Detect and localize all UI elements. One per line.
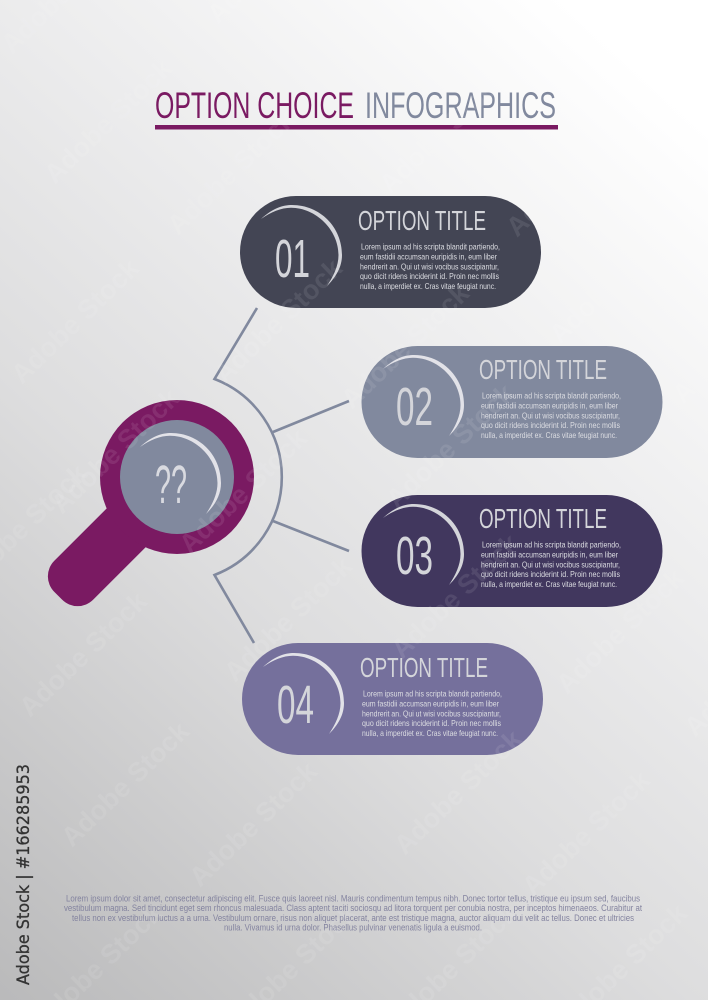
panel: option 01: hendrerit an. Qui ut wisi vocibus suscipiantur, (360, 261, 499, 271)
panel: option 02: 02 (396, 377, 433, 437)
stock id label: Adobe Stock | #166285953 (14, 764, 34, 985)
panel: option 04: nulla, a imperdiet ex. Cras vitae feugiat nunc. (362, 728, 498, 738)
panel: option 03: OPTION TITLE (479, 503, 607, 534)
watermark pattern: Adobe Stock (543, 212, 684, 349)
watermark pattern: Adobe Stock (380, 377, 521, 514)
panel: option 03: nulla, a imperdiet ex. Cras vitae feugiat nunc. (481, 579, 617, 589)
panel: option 04: quo dicit ridens inciderint id. Proin nec mollis (362, 718, 501, 728)
title: OPTION CHOICE (155, 85, 354, 126)
panel: option 01 (240, 196, 541, 308)
watermark pattern: Adobe Stock (373, 62, 514, 199)
watermark pattern: Adobe Stock (55, 715, 196, 852)
panel: option 03: Lorem ipsum ad his scripta blandit partiendo, (482, 540, 621, 550)
panel: option 04: Lorem ipsum ad his scripta blandit partiendo, (363, 688, 502, 698)
panel: option 03: quo dicit ridens inciderint id. Proin nec mollis (481, 569, 620, 579)
watermark pattern: Adobe Stock (550, 562, 691, 699)
footer text block: nulla. Vivamus id urna dolor. Phasellus pulvinar venenatis ligula a euismod. (224, 922, 482, 932)
panel: option 02: quo dicit ridens inciderint id. Proin nec mollis (481, 420, 620, 430)
icon: magnifying glass (39, 400, 254, 615)
watermark pattern: Adobe Stock (500, 105, 641, 242)
panel: option 01: 01 (275, 229, 310, 289)
watermark pattern: Adobe Stock (38, 52, 179, 189)
panel: option 04: 04 (277, 675, 314, 735)
title underline (155, 125, 558, 130)
panel: option 04: eum fastidii accumsan euripidis in, eum liber (362, 698, 499, 708)
panel: option 01: OPTION TITLE (358, 205, 486, 236)
watermark pattern: Adobe Stock (385, 527, 526, 664)
watermark pattern: Adobe Stock (208, 252, 349, 389)
watermark pattern: Adobe Stock (516, 764, 657, 901)
watermark pattern: Adobe Stock (335, 277, 476, 414)
panel: option 02: nulla, a imperdiet ex. Cras vitae feugiat nunc. (481, 430, 617, 440)
panel: option 04: hendrerit an. Qui ut wisi vocibus suscipiantur, (362, 708, 501, 718)
panel: option 02: eum fastidii accumsan euripidis in, eum liber (481, 400, 618, 410)
panel: option 02: Lorem ipsum ad his scripta blandit partiendo, (482, 390, 621, 400)
panel: option 03: 03 (396, 526, 433, 586)
watermark pattern: Adobe Stock (45, 382, 186, 519)
watermark pattern: Adobe Stock (13, 585, 154, 722)
panel: option 03 (362, 495, 662, 607)
watermark pattern: Adobe Stock (173, 422, 314, 559)
panel: option 02: OPTION TITLE (479, 354, 607, 385)
footer text block: tellus non ex vestibulum luctus a a urna. Vestibulum ornare, risus non aliquet placerat, ante est tristique magna, auctor aliquam dui velit ac tellus. Donec et ultricies (72, 913, 634, 923)
panel: option 01: Lorem ipsum ad his scripta blandit partiendo, (361, 242, 500, 252)
watermark pattern: Adobe Stock (183, 755, 324, 892)
watermark pattern: Adobe Stock (161, 103, 302, 240)
footer text block: Lorem ipsum dolor sit amet, consectetur adipiscing elit. Fusce quis laoreet nisl. Mauris condimentum tempus nibh. Donec tortor tellus, tristique eu ipsum sed, faucibus (66, 894, 640, 904)
panel: option 04: OPTION TITLE (360, 652, 488, 683)
panel: option 04 (242, 643, 543, 755)
panel: option 01: nulla, a imperdiet ex. Cras vitae feugiat nunc. (360, 281, 496, 291)
watermark pattern: Adobe Stock (388, 723, 529, 860)
panel: option 01: eum fastidii accumsan euripidis in, eum liber (360, 252, 497, 262)
footer text block (64, 894, 642, 932)
panel: option 03: eum fastidii accumsan euripidis in, eum liber (481, 550, 618, 560)
connector lines (214, 308, 349, 643)
watermark pattern: Adobe Stock (5, 252, 146, 389)
panel: option 02: hendrerit an. Qui ut wisi vocibus suscipiantur, (481, 410, 620, 420)
title: INFOGRAPHICS (365, 85, 556, 126)
panel: option 02 (362, 346, 662, 458)
panel: option 01: quo dicit ridens inciderint id. Proin nec mollis (360, 271, 499, 281)
panel: option 03: hendrerit an. Qui ut wisi vocibus suscipiantur, (481, 559, 620, 569)
icon: magnifying glass: ?? (155, 455, 187, 515)
watermark pattern: Adobe Stock (218, 550, 359, 687)
